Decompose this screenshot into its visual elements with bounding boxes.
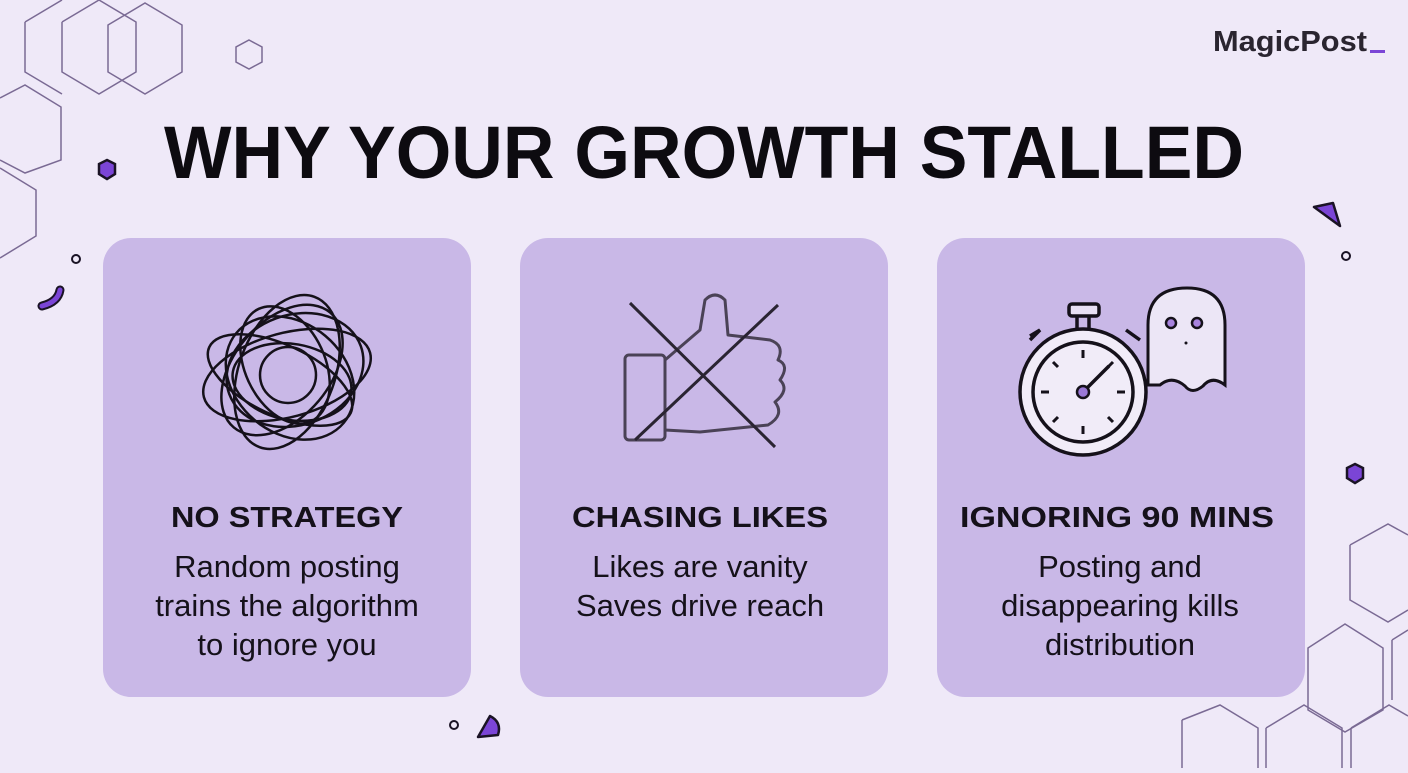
icon: tangled scribble xyxy=(193,280,381,465)
body text: Saves drive reach xyxy=(576,588,824,623)
icon: crossed thumbs up xyxy=(625,295,785,447)
body text: to ignore you xyxy=(197,627,377,662)
icon: ghost xyxy=(1148,288,1225,390)
heading: NO STRATEGY xyxy=(171,502,403,534)
logo: MagicPost: MagicPost xyxy=(1213,26,1367,58)
panel: ignoring 90 mins xyxy=(937,238,1305,697)
heading: CHASING LIKES xyxy=(572,502,828,534)
panel: no strategy xyxy=(103,238,471,697)
body text: distribution xyxy=(1045,627,1195,662)
body text: Random posting xyxy=(174,549,400,584)
body text: Posting and xyxy=(1038,549,1202,584)
panel: chasing likes xyxy=(520,238,888,697)
body text: Likes are vanity xyxy=(592,549,808,584)
title: WHY YOUR GROWTH STALLED xyxy=(164,111,1244,194)
body text: trains the algorithm xyxy=(155,588,419,623)
body text: disappearing kills xyxy=(1001,588,1239,623)
icon: stopwatch xyxy=(1020,304,1146,455)
heading: IGNORING 90 MINS xyxy=(960,502,1274,534)
